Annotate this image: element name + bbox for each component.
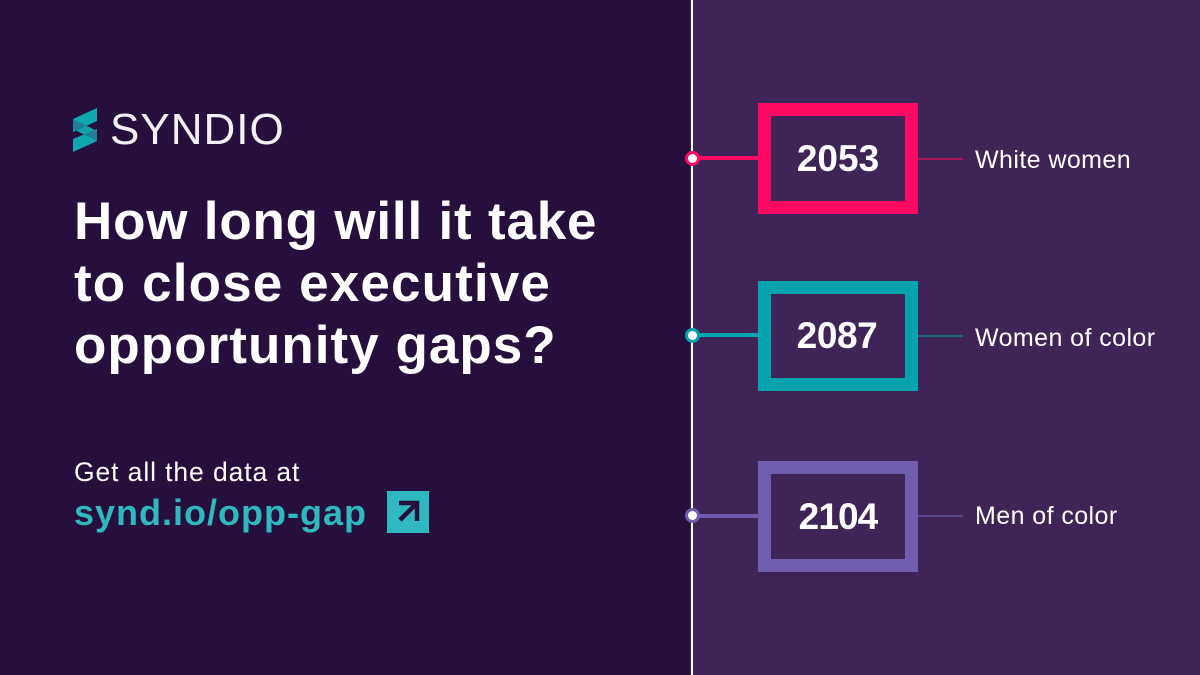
timeline vertical line (691, 0, 693, 675)
connector line (692, 156, 758, 160)
label: Women of color (975, 324, 1156, 352)
timeline dot (685, 508, 700, 523)
title: opportunity gaps? (74, 316, 557, 375)
year box 2053 (758, 103, 918, 214)
year box 2104: 2104 (799, 496, 877, 537)
timeline dot (685, 328, 700, 343)
year box 2087 (758, 281, 918, 391)
item: White women (685, 103, 1131, 214)
connector line (692, 514, 758, 518)
call to action text: Get all the data at (74, 457, 300, 487)
title: How long will it take (74, 192, 597, 251)
icon: arrow link (387, 491, 429, 533)
label: White women (975, 146, 1131, 174)
year box 2053: 2053 (797, 138, 879, 179)
timeline dot (685, 151, 700, 166)
label connector (918, 515, 963, 517)
panel: right background (690, 0, 1200, 675)
label connector (918, 335, 963, 337)
year box 2104 (758, 461, 918, 572)
title (74, 192, 597, 375)
logo wordmark: SYNDIO (110, 105, 285, 154)
item: Men of color (685, 461, 1118, 572)
title: to close executive (74, 254, 551, 313)
logo: Syndio (73, 105, 285, 154)
label: Men of color (975, 502, 1118, 530)
icon: Syndio mark (73, 108, 97, 152)
label connector (918, 158, 963, 160)
year box 2087: 2087 (797, 315, 877, 356)
link text: synd.io/opp-gap (74, 492, 367, 533)
item: Women of color (685, 281, 1156, 391)
connector line (692, 333, 758, 337)
